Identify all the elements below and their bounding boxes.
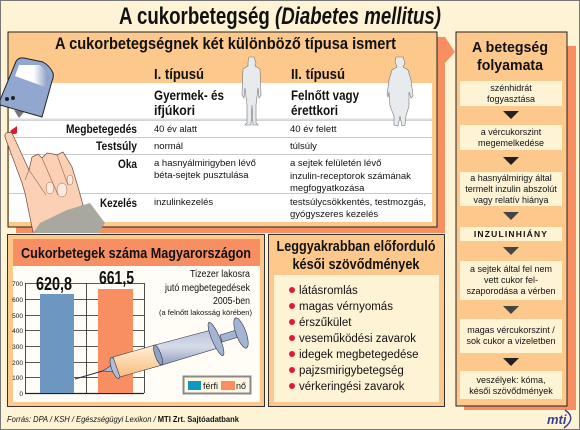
icon: hand with blood drop <box>5 126 105 233</box>
chart note: 2005-ben <box>213 296 250 307</box>
type I age group <box>154 88 224 118</box>
step texts: veszélyek: kóma, <box>476 375 546 385</box>
icon: overweight figure <box>387 57 413 126</box>
legend: férfi <box>203 381 218 391</box>
complications heading: késői szövődmények <box>292 257 420 273</box>
step texts: késői szövődmények <box>469 386 553 396</box>
step texts: magas vércukorszint / <box>467 325 555 335</box>
row labels: Oka <box>118 157 137 171</box>
step texts: termelt inzulin abszolút <box>465 184 557 194</box>
column heading: type II: II. típusú <box>291 66 345 83</box>
bar chart: 100 <box>12 375 23 382</box>
step texts: vagy relatív hiánya <box>473 195 549 205</box>
complications list: veseműködési zavarok <box>299 333 416 345</box>
bar chart: 300 <box>12 344 23 351</box>
title: A cukorbetegség (Diabetes mellitus) <box>119 3 441 30</box>
type II details: inzulin-receptorok számának <box>290 171 411 182</box>
type II age group <box>291 88 359 118</box>
bar chart: 661,5 <box>99 268 134 288</box>
logo: mti: mti <box>547 412 567 427</box>
type I age group: ifjúkori <box>154 103 195 118</box>
step texts: a sejtek által fel nem <box>470 264 552 274</box>
step boxes <box>460 81 562 399</box>
bar chart <box>12 268 144 398</box>
legend: nő <box>236 381 246 391</box>
type I details: a hasnyálmirigyben lévő <box>154 158 256 169</box>
step texts: szaporodása a vérben <box>466 286 556 296</box>
type II details: 40 év felett <box>290 124 337 135</box>
icon: syringe <box>75 316 251 380</box>
type I details <box>154 124 256 208</box>
chart note: (a felnőtt lakosság körében) <box>159 308 252 317</box>
complications list: magas vérnyomás <box>299 301 393 313</box>
complications list: érszűkület <box>299 317 352 329</box>
logo: mti <box>547 410 571 428</box>
step texts: vett cukor fel- <box>484 275 538 285</box>
chart note: jutó megbetegedések <box>164 283 251 294</box>
type II details: gyógyszeres kezelés <box>290 209 378 220</box>
type II details: túlsúly <box>290 141 317 152</box>
panel: number of diabetics in Hungary <box>8 234 264 406</box>
row labels: Megbetegedés <box>66 122 137 136</box>
bar chart: 200 <box>12 360 23 367</box>
icon: blood glucose meter <box>0 58 53 118</box>
type II details <box>290 124 426 220</box>
bar chart: 700 <box>12 281 23 288</box>
step texts: fogyasztása <box>487 94 535 104</box>
type II age group: érettkori <box>291 103 338 118</box>
legend <box>184 376 250 394</box>
type I details: inzulinkezelés <box>154 197 213 208</box>
bar chart: 620,8 <box>36 274 72 294</box>
row labels: Kezelés <box>100 196 137 210</box>
complications list: idegek megbetegedése <box>299 349 419 361</box>
row labels <box>66 122 137 210</box>
course heading <box>472 39 548 74</box>
source line: Forrás: DPA / KSH / Egészségügyi Lexikon / MTI Zrt. Sajtóadatbank <box>7 415 240 424</box>
type I age group: Gyermek- és <box>154 88 224 103</box>
complications list: látásromlás <box>299 285 358 297</box>
chart note: Tizezer lakosra <box>190 269 250 280</box>
panel: two types of diabetes <box>8 32 455 233</box>
step texts: szénhidrát <box>490 83 532 93</box>
type II details: a sejtek felületén lévő <box>290 158 381 169</box>
bar chart: 600 <box>12 297 23 304</box>
complications list: pajzsmirigybetegség <box>299 365 404 377</box>
step texts: sok cukor a vizeletben <box>466 336 556 346</box>
step texts: a hasnyálmirigy által <box>470 173 552 183</box>
row labels: Testsúly <box>96 139 137 153</box>
chart note <box>159 269 252 317</box>
complications heading <box>276 239 436 273</box>
course heading: folyamata <box>477 57 544 74</box>
complications heading: Leggyakrabban előforduló <box>276 239 436 255</box>
bar chart: 400 <box>12 328 23 335</box>
course heading: A betegség <box>472 39 548 56</box>
chart heading: Cukorbetegek száma Magyarországon <box>21 245 251 262</box>
bar chart: 0 <box>19 391 23 398</box>
step texts: INZULINHIÁNY <box>474 229 548 239</box>
type II details: testsúlycsökkentés, testmozgás, <box>290 197 426 208</box>
panel heading: A cukorbetegségnek két különböző típusa ismert <box>55 34 396 53</box>
step texts: megemelkedése <box>478 138 544 148</box>
icon: slim figure <box>242 57 261 125</box>
arrows <box>503 111 519 366</box>
step texts: a vércukorszint <box>481 127 542 137</box>
type II details: megfogyatkozása <box>290 183 365 194</box>
panel: late complications <box>268 234 444 406</box>
type I details: béta-sejtek pusztulása <box>154 170 249 181</box>
bar chart: 500 <box>12 313 23 320</box>
type I details: normál <box>154 141 183 152</box>
type II age group: Felnőtt vagy <box>291 88 359 103</box>
complications list <box>289 285 419 393</box>
step texts <box>465 83 557 396</box>
type I details: 40 év alatt <box>154 124 197 135</box>
complications list: vérkeringési zavarok <box>299 381 405 393</box>
panel: course of the disease <box>456 32 576 410</box>
column heading: type I: I. típusú <box>154 66 204 83</box>
